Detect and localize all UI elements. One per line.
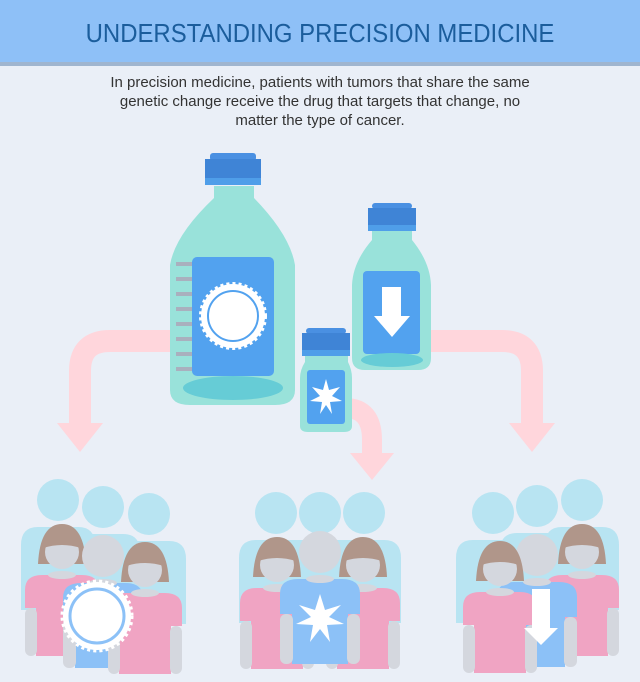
people group: star — [239, 492, 401, 669]
icon: down arrow — [524, 589, 558, 645]
header band — [0, 0, 640, 66]
people group: sun — [21, 479, 186, 674]
icon: sun badge — [63, 582, 131, 650]
arrow: middle — [345, 408, 394, 480]
bottle: large with sun label — [170, 153, 295, 405]
arrow: left — [57, 341, 172, 452]
subtitle text: matter the type of cancer. — [235, 112, 405, 129]
subtitle text — [110, 74, 530, 129]
subtitle text: In precision medicine, patients with tumors that share the same — [110, 74, 530, 91]
arrow: right — [428, 341, 555, 452]
bottle: right with arrow label — [352, 203, 431, 370]
title: UNDERSTANDING PRECISION MEDICINE — [86, 18, 554, 48]
people group: arrow — [456, 479, 619, 673]
bottle: small with star label — [300, 328, 352, 432]
subtitle text: genetic change receive the drug that targets that change, no — [120, 93, 520, 110]
icon: star — [296, 594, 344, 642]
